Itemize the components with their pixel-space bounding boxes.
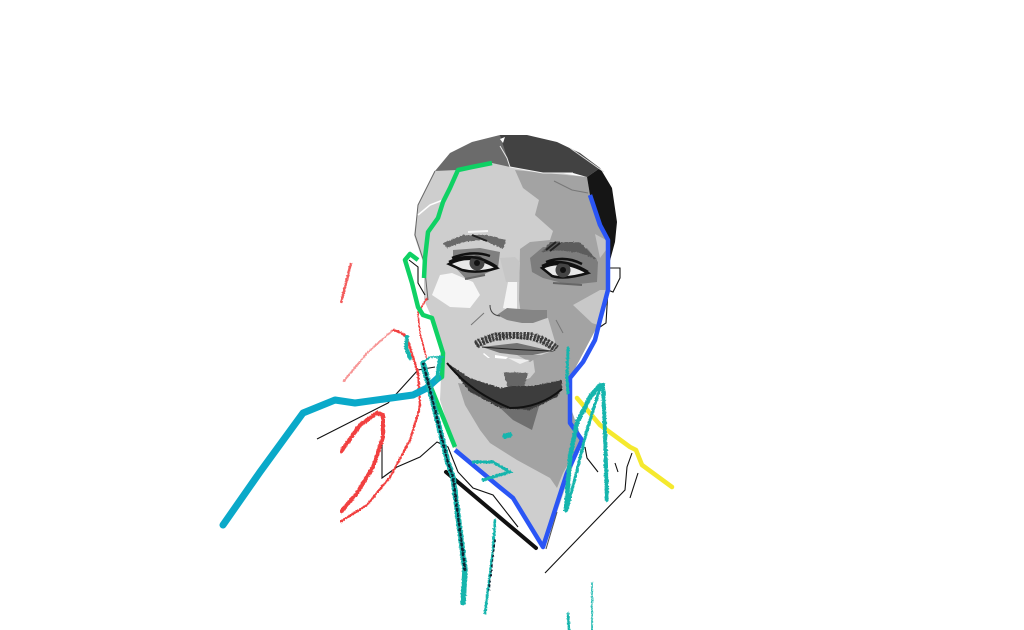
jaw shadow bbox=[497, 403, 540, 430]
beard bbox=[447, 363, 562, 410]
mouth bbox=[482, 343, 552, 364]
left eye bbox=[449, 248, 500, 280]
black diagonal stroke bbox=[446, 472, 536, 548]
cyan stroke bbox=[223, 378, 438, 525]
nose highlight bbox=[503, 280, 517, 312]
left cheek highlight bbox=[432, 273, 480, 308]
yellow stroke bbox=[577, 398, 672, 487]
illustration: portrait with coloured strokes bbox=[220, 135, 674, 630]
head outline bbox=[415, 171, 588, 300]
shaded right side of face and neck bbox=[458, 170, 606, 488]
nose bridge bbox=[500, 257, 520, 282]
face base bbox=[414, 163, 606, 547]
teal sketch strokes bbox=[406, 337, 607, 630]
right cheek highlight bbox=[573, 290, 606, 325]
moustache bbox=[476, 335, 556, 349]
red sketch strokes bbox=[340, 263, 427, 522]
right temple highlight bbox=[595, 234, 606, 258]
green stroke bbox=[405, 163, 492, 447]
nose bbox=[471, 305, 563, 333]
hair bbox=[435, 135, 617, 268]
right eye bbox=[530, 247, 598, 285]
blue stroke bbox=[455, 195, 608, 547]
left eyebrow bbox=[443, 231, 506, 249]
soul patch bbox=[496, 372, 534, 391]
right eyebrow bbox=[542, 242, 597, 260]
clothing outlines bbox=[317, 260, 638, 573]
ear outlines bbox=[409, 260, 425, 295]
